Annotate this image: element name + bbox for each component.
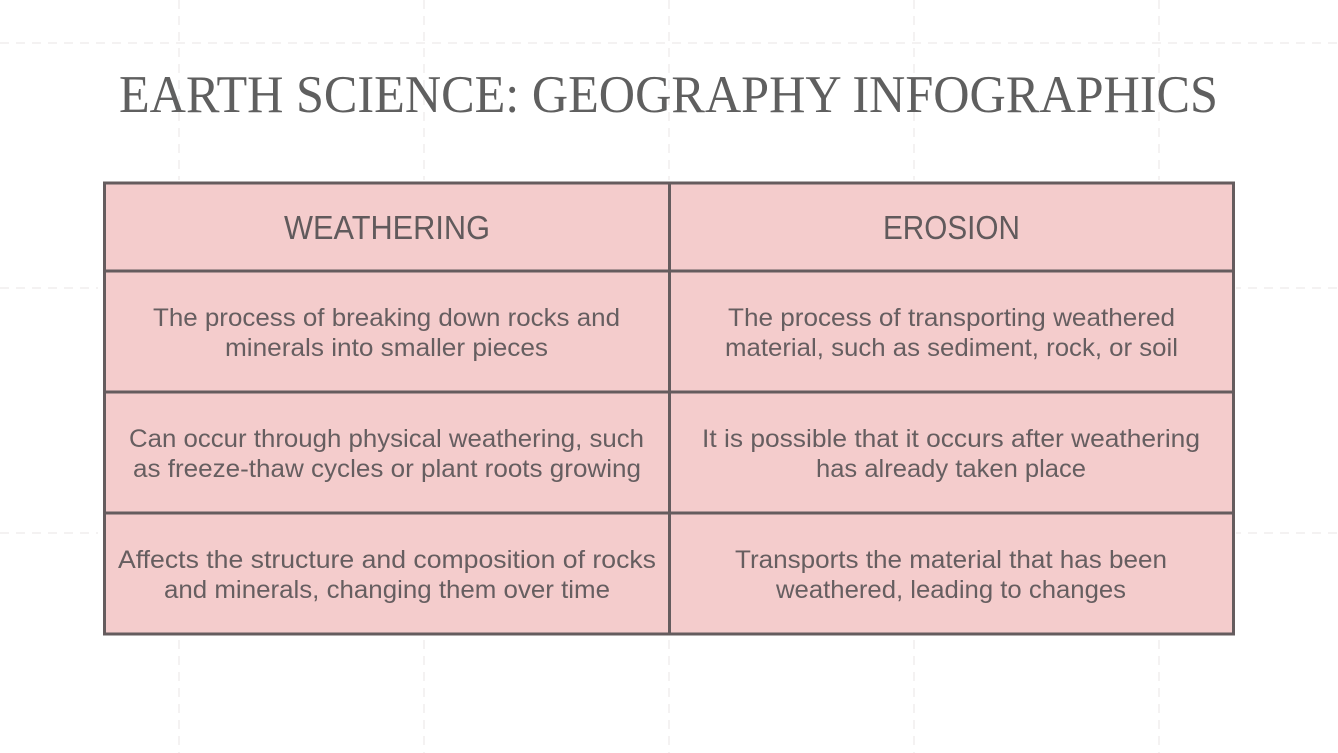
comparison table xyxy=(104,183,1234,634)
row 3 weathering text xyxy=(118,546,656,604)
row 1 weathering text: The process of breaking down rocks and xyxy=(153,304,620,332)
row 1 erosion text: The process of transporting weathered xyxy=(728,304,1175,332)
row 2 erosion text: has already taken place xyxy=(816,455,1086,483)
row 1 weathering text xyxy=(153,304,620,362)
row 3 erosion text: weathered, leading to changes xyxy=(775,576,1126,604)
title: EARTH SCIENCE: GEOGRAPHY INFOGRAPHICS xyxy=(119,66,1218,124)
row 2 erosion text xyxy=(702,425,1200,483)
row 2 weathering text xyxy=(129,425,644,483)
table grid lines xyxy=(104,183,1234,634)
row 3 weathering text: Affects the structure and composition of rocks xyxy=(118,546,656,574)
header: erosion: EROSION xyxy=(883,209,1020,246)
header: weathering: WEATHERING xyxy=(284,209,490,246)
row 2 weathering text: as freeze-thaw cycles or plant roots growing xyxy=(133,455,641,483)
row 3 weathering text: and minerals, changing them over time xyxy=(164,576,610,604)
row 3 erosion text: Transports the material that has been xyxy=(735,546,1167,574)
row 1 erosion text xyxy=(725,304,1178,362)
row 1 erosion text: material, such as sediment, rock, or soil xyxy=(725,334,1178,362)
row 2 erosion text: It is possible that it occurs after weathering xyxy=(702,425,1200,453)
row 3 erosion text xyxy=(735,546,1167,604)
row 1 weathering text: minerals into smaller pieces xyxy=(225,334,548,362)
table background xyxy=(104,183,1234,634)
row 2 weathering text: Can occur through physical weathering, such xyxy=(129,425,644,453)
